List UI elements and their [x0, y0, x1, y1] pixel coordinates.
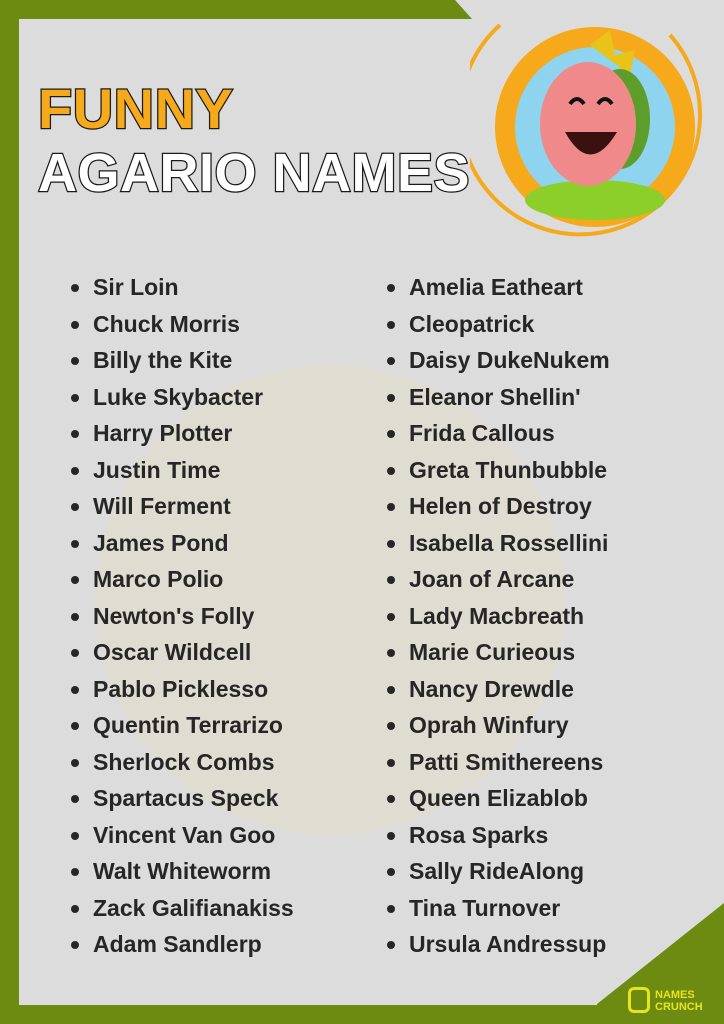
- list: left column: Billy the Kite: [93, 347, 232, 373]
- logo: CRUNCH: [655, 1001, 703, 1013]
- list: left column: Will Ferment: [93, 493, 231, 519]
- logo: [628, 987, 703, 1013]
- list: left column: Pablo Picklesso: [93, 676, 268, 702]
- list: right column: Daisy DukeNukem: [409, 347, 610, 373]
- list: right column: Queen Elizablob: [409, 785, 588, 811]
- list: left column: Sherlock Combs: [93, 748, 274, 774]
- icon: mascot circle: [470, 24, 702, 236]
- list: right column: Joan of Arcane: [409, 566, 574, 592]
- list: left column: Adam Sandlerp: [93, 931, 262, 957]
- list: right column: Cleopatrick: [409, 310, 534, 336]
- list: right column: Rosa Sparks: [409, 822, 548, 848]
- list: right column: Tina Turnover: [409, 894, 560, 920]
- list: right column: Oprah Winfury: [409, 712, 569, 738]
- list: right column: [387, 274, 610, 957]
- list: right column: Greta Thunbubble: [409, 456, 607, 482]
- list: right column: Marie Curieous: [409, 639, 575, 665]
- list: left column: Zack Galifianakiss: [93, 894, 294, 920]
- title: FUNNY: FUNNY: [38, 77, 233, 140]
- list: left column: Spartacus Speck: [93, 785, 278, 811]
- list: right column: Nancy Drewdle: [409, 676, 574, 702]
- list: right column: Eleanor Shellin': [409, 384, 581, 410]
- list: right column: Patti Smithereens: [409, 748, 603, 774]
- watermark: [95, 365, 565, 835]
- list: left column: Oscar Wildcell: [93, 639, 251, 665]
- list: left column: Marco Polio: [93, 566, 223, 592]
- list: right column: Lady Macbreath: [409, 602, 584, 628]
- list: left column: Harry Plotter: [93, 420, 232, 446]
- list: left column: Sir Loin: [93, 274, 179, 300]
- list: right column: Frida Callous: [409, 420, 555, 446]
- list: right column: Ursula Andressup: [409, 931, 606, 957]
- logo: NAMES: [655, 989, 695, 1001]
- list: right column: Amelia Eatheart: [409, 274, 583, 300]
- list: left column: [71, 274, 294, 957]
- list: right column: Helen of Destroy: [409, 493, 592, 519]
- list: left column: Newton's Folly: [93, 602, 254, 628]
- list: left column: James Pond: [93, 530, 228, 556]
- list: left column: Justin Time: [93, 456, 220, 482]
- list: right column: Sally RideAlong: [409, 858, 584, 884]
- list: left column: Quentin Terrarizo: [93, 712, 283, 738]
- list: right column: Isabella Rossellini: [409, 530, 608, 556]
- list: left column: Walt Whiteworm: [93, 858, 271, 884]
- list: left column: Vincent Van Goo: [93, 822, 275, 848]
- list: left column: Chuck Morris: [93, 310, 240, 336]
- list: left column: Luke Skybacter: [93, 384, 263, 410]
- title: AGARIO NAMES: AGARIO NAMES: [38, 143, 470, 203]
